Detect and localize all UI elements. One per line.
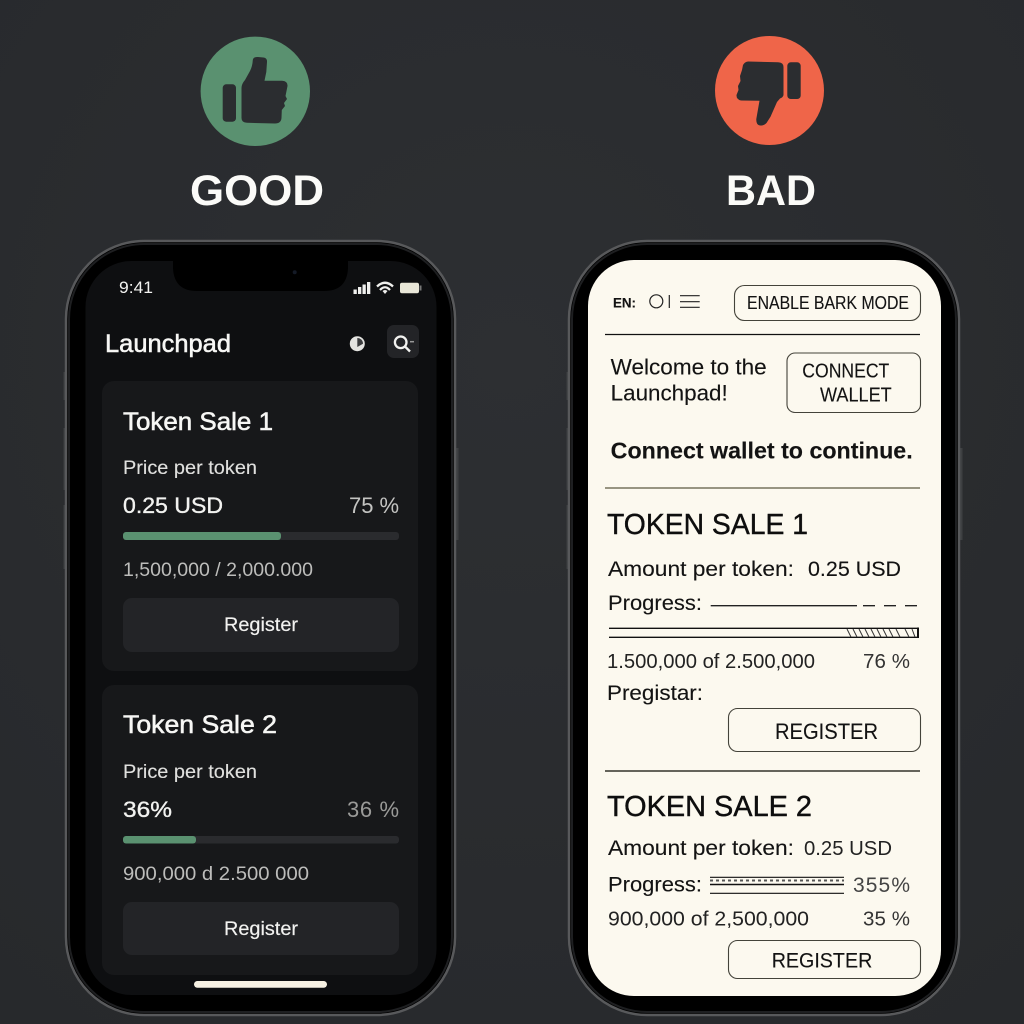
welcome text: Welcome to the (611, 354, 767, 379)
supply row: 900,000 of 2,500,000 (608, 908, 809, 931)
register button: Register (224, 614, 299, 636)
supply row: 1.500,000 of 2.500,000 (607, 650, 815, 673)
progress bar (123, 836, 399, 844)
price value: 0.25 USD (123, 493, 223, 518)
percent value: 75 % (349, 493, 399, 518)
price label: Price per token (123, 458, 257, 479)
register button (123, 598, 399, 652)
icon: search button (387, 325, 419, 358)
icon: language and menu glyphs (650, 295, 700, 308)
supply row: 35 % (863, 908, 910, 931)
button: enable bark mode: ENABLE BARK MODE (747, 293, 909, 313)
button: connect wallet (787, 353, 920, 412)
notice: connect wallet to continue: Connect wallet to continue. (611, 437, 913, 463)
progress bar: hatched (609, 628, 918, 638)
price label: Price per token (123, 762, 257, 783)
welcome text: Launchpad! (611, 381, 728, 406)
card title: Token Sale 1 (123, 408, 273, 436)
amount row: 0.25 USD (804, 837, 892, 860)
button: register: REGISTER (772, 948, 872, 972)
register label: Pregistar: (607, 682, 703, 705)
progress row: hatched: 355% (853, 874, 910, 897)
supply count: 900,000 d 2.500 000 (123, 864, 309, 885)
button: connect wallet: CONNECT (802, 361, 889, 383)
welcome text (611, 354, 767, 406)
supply row: 76 % (863, 650, 910, 673)
percent value: 36 % (347, 797, 399, 822)
amount row: Amount per token: (608, 837, 794, 860)
app title: Launchpad: Launchpad (105, 330, 231, 358)
phone body: good (64, 241, 458, 1015)
amount row: 0.25 USD (808, 558, 901, 581)
button: register (728, 940, 920, 978)
status bar: 9:41 (119, 279, 153, 297)
amount row (608, 558, 901, 581)
panel: bad token sale 2 (607, 791, 920, 978)
progress bar (123, 532, 399, 540)
phone: good dark UI (64, 241, 458, 1015)
notch (173, 258, 348, 291)
home indicator (194, 981, 327, 988)
panel: bad token sale 1 (607, 509, 920, 752)
button: register: REGISTER (775, 719, 878, 744)
supply count: 1,500,000 / 2,000.000 (123, 560, 313, 581)
language label: EN: (613, 296, 636, 311)
progress row: hatched (608, 874, 910, 897)
supply row (608, 908, 910, 931)
price value: 36% (123, 797, 172, 822)
icon: contrast toggle (350, 336, 365, 351)
heading: BAD: BAD (726, 167, 816, 215)
supply row (607, 650, 910, 673)
register button: Register (224, 918, 299, 940)
section heading: TOKEN SALE 1 (607, 509, 808, 541)
button: enable bark mode (734, 286, 920, 320)
icon: thumbs up (201, 37, 310, 146)
progress label and dashed line: Progress: (608, 592, 702, 615)
panel: token sale 1 card (102, 381, 418, 671)
progress row: hatched: Progress: (608, 874, 702, 897)
button: register (728, 708, 920, 752)
status bar (119, 279, 422, 297)
button: connect wallet: WALLET (820, 385, 892, 407)
card title: Token Sale 2 (123, 711, 277, 739)
phone: bad light UI (566, 241, 962, 1015)
amount row: Amount per token: (608, 558, 794, 581)
amount row (608, 837, 892, 860)
heading: GOOD: GOOD (190, 167, 324, 215)
icon: thumbs down (715, 36, 824, 145)
section heading: TOKEN SALE 2 (607, 791, 812, 823)
phone body: bad (566, 241, 962, 1015)
panel: token sale 2 card (102, 685, 418, 975)
register button (123, 902, 399, 955)
